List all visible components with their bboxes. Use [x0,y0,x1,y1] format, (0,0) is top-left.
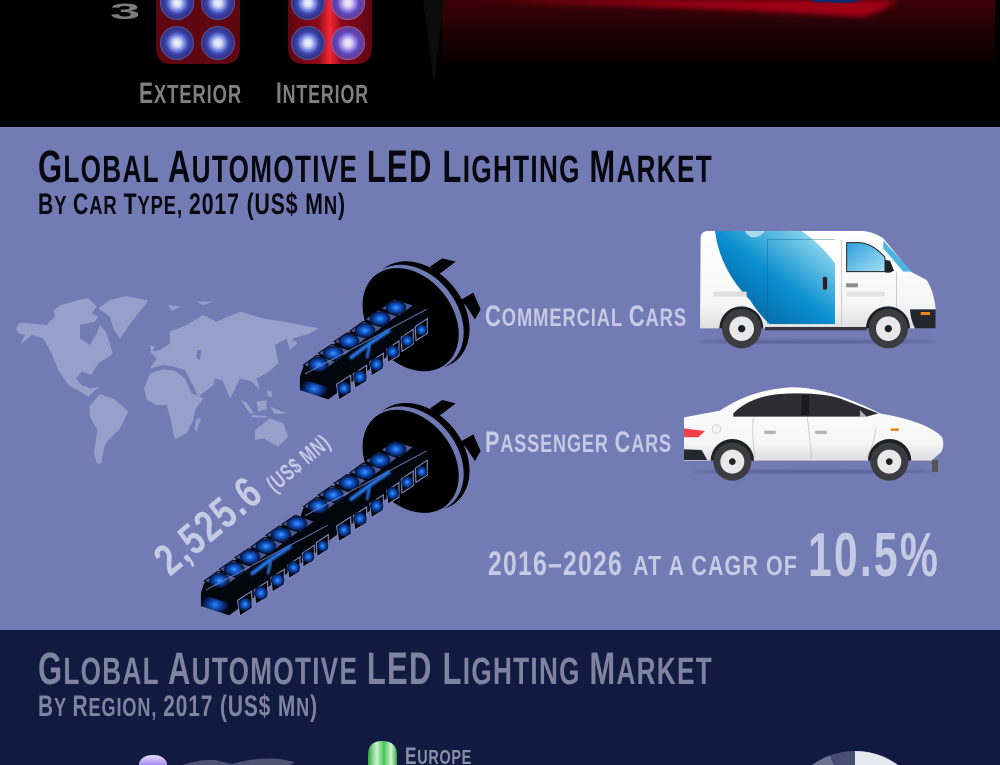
CAGR callout: 10.5% [808,521,940,590]
CAGR callout [488,521,940,590]
icon: purple LED [139,755,167,765]
label: exterior: EXTERIOR [139,77,242,110]
subheading: by car type: BY CAR TYPE, 2017 (US$ MN) [38,188,346,221]
label: passenger cars: PASSENGER CARS [485,426,672,459]
panel: by region [0,630,1000,765]
value: 2,525.6 [145,413,337,585]
CAGR callout: 2016–2026 [488,545,623,583]
heading: by car type: GLOBAL AUTOMOTIVE LED LIGHTING MARKET [38,141,713,192]
world map [16,296,318,463]
label: commercial cars: COMMERCIAL CARS [485,300,687,333]
icon: LED bulb, passenger cars [201,383,490,616]
world map fragment [183,759,295,765]
rotated numeral: 3 [110,0,143,24]
red car glow [423,0,995,85]
subheading: by region: BY REGION, 2017 (US$ MN) [38,690,318,723]
LED tile: interior [288,0,372,64]
icon: LED bulb, commercial cars [300,241,490,400]
icon: green LED [368,741,397,765]
value: 2,525.6: 2,525.6 [145,467,272,585]
LED tile: exterior [156,0,240,64]
illustration: van [697,231,937,348]
illustration: sedan [684,387,943,481]
panel: LED types header (black) [0,0,1000,127]
panel: by car type [0,127,1000,630]
heading: by region: GLOBAL AUTOMOTIVE LED LIGHTING MARKET [38,643,713,694]
value: 2,525.6: (US$ MN) [261,429,335,497]
label: interior: INTERIOR [276,77,369,110]
pie chart [812,751,898,765]
CAGR callout: AT A CAGR OF [633,550,798,581]
